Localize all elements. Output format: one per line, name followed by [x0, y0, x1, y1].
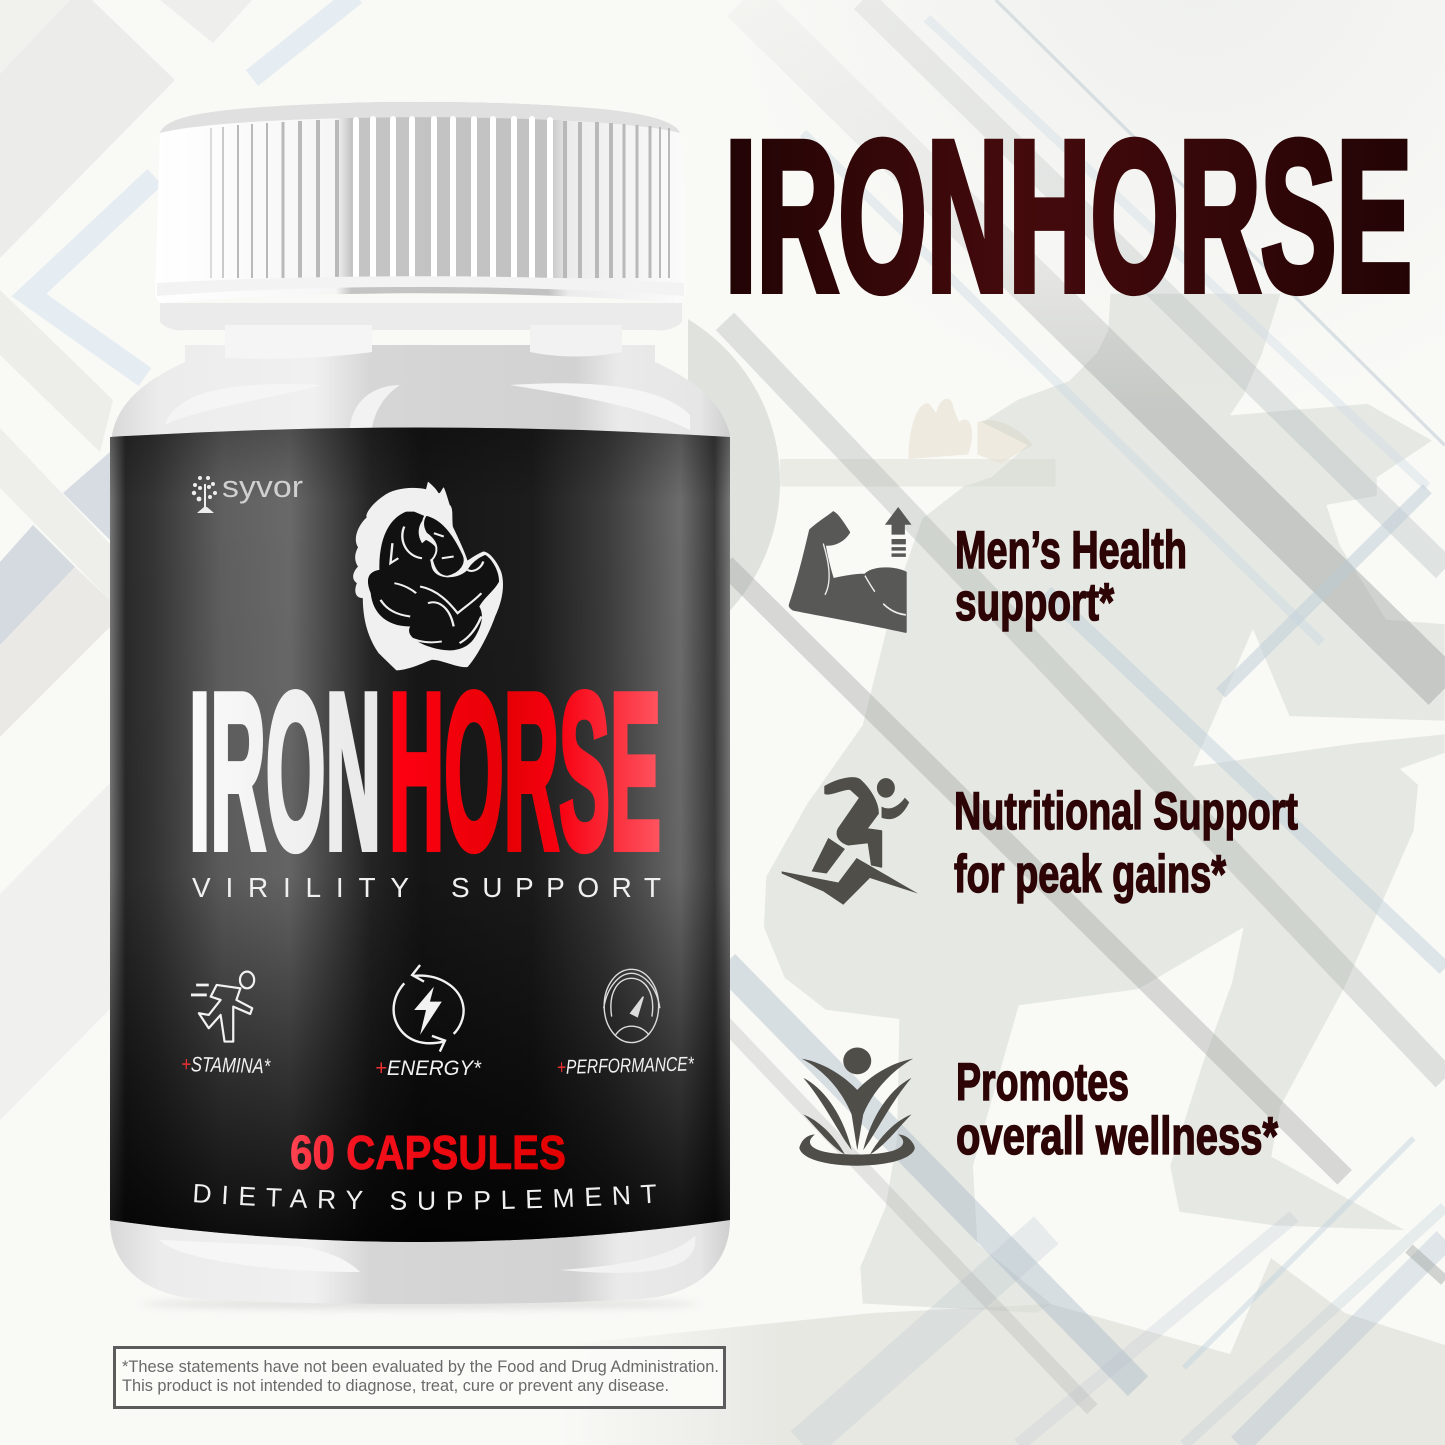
background diagonal bands right — [725, 0, 1445, 1445]
icon: flexed arm with up arrow — [790, 507, 912, 632]
text — [954, 782, 1298, 904]
bottle label — [110, 428, 730, 1242]
icon: speedometer — [604, 969, 660, 1043]
benefit row: nutritional support — [782, 778, 1298, 905]
text — [956, 1053, 1278, 1166]
brand logo: syvor — [192, 469, 303, 513]
label: +ENERGY* — [375, 1057, 482, 1080]
bottle cap — [155, 102, 686, 303]
capsule count: 60 CAPSULES — [290, 1127, 566, 1180]
icon: lightning bolt in arrows — [394, 965, 464, 1052]
benefit: energy — [375, 965, 482, 1080]
icon: running man — [191, 972, 254, 1042]
text: for peak gains* — [954, 845, 1226, 904]
disclaimer box — [114, 1348, 724, 1408]
icon: tree — [192, 476, 217, 513]
text: Promotes — [956, 1053, 1129, 1112]
product name on label: IRON — [189, 648, 381, 896]
benefit: stamina — [181, 972, 271, 1078]
benefit: performance — [557, 969, 695, 1079]
tagline: SUPPORT — [451, 872, 661, 903]
brand name: syvor — [222, 469, 303, 504]
barbell plate — [688, 319, 780, 610]
silhouette of man squatting with barbell — [764, 294, 1445, 1313]
text: Nutritional Support — [954, 782, 1298, 841]
text: support* — [955, 573, 1114, 632]
product bottle — [110, 102, 730, 1311]
disclaimer box: This product is not intended to diagnose, treat, cure or prevent any disease. — [122, 1377, 669, 1395]
tagline: VIRILITY — [192, 872, 409, 903]
bottle body — [110, 345, 730, 1304]
label: +STAMINA* — [181, 1053, 271, 1078]
neck highlights — [160, 303, 695, 1273]
icon: wellness figure — [799, 1048, 915, 1166]
tagline — [192, 872, 661, 903]
text: Men’s Health — [955, 521, 1187, 580]
icon: muscular horse logo — [353, 482, 503, 670]
icon: sprinter — [782, 778, 918, 905]
disclaimer box: *These statements have not been evaluated by the Food and Drug Administration. — [122, 1358, 719, 1376]
bottle shadow — [140, 1299, 700, 1309]
benefit row: men's health — [790, 507, 1187, 632]
text: overall wellness* — [956, 1107, 1278, 1166]
dietary supplement line: DIETARY SUPPLEMENT — [194, 1184, 656, 1210]
infographic canvas: HORSE — [389, 648, 661, 896]
label: +PERFORMANCE* — [557, 1053, 695, 1079]
floor shadow — [560, 1258, 1445, 1445]
benefit row: overall wellness — [799, 1048, 1278, 1166]
text — [955, 521, 1187, 632]
